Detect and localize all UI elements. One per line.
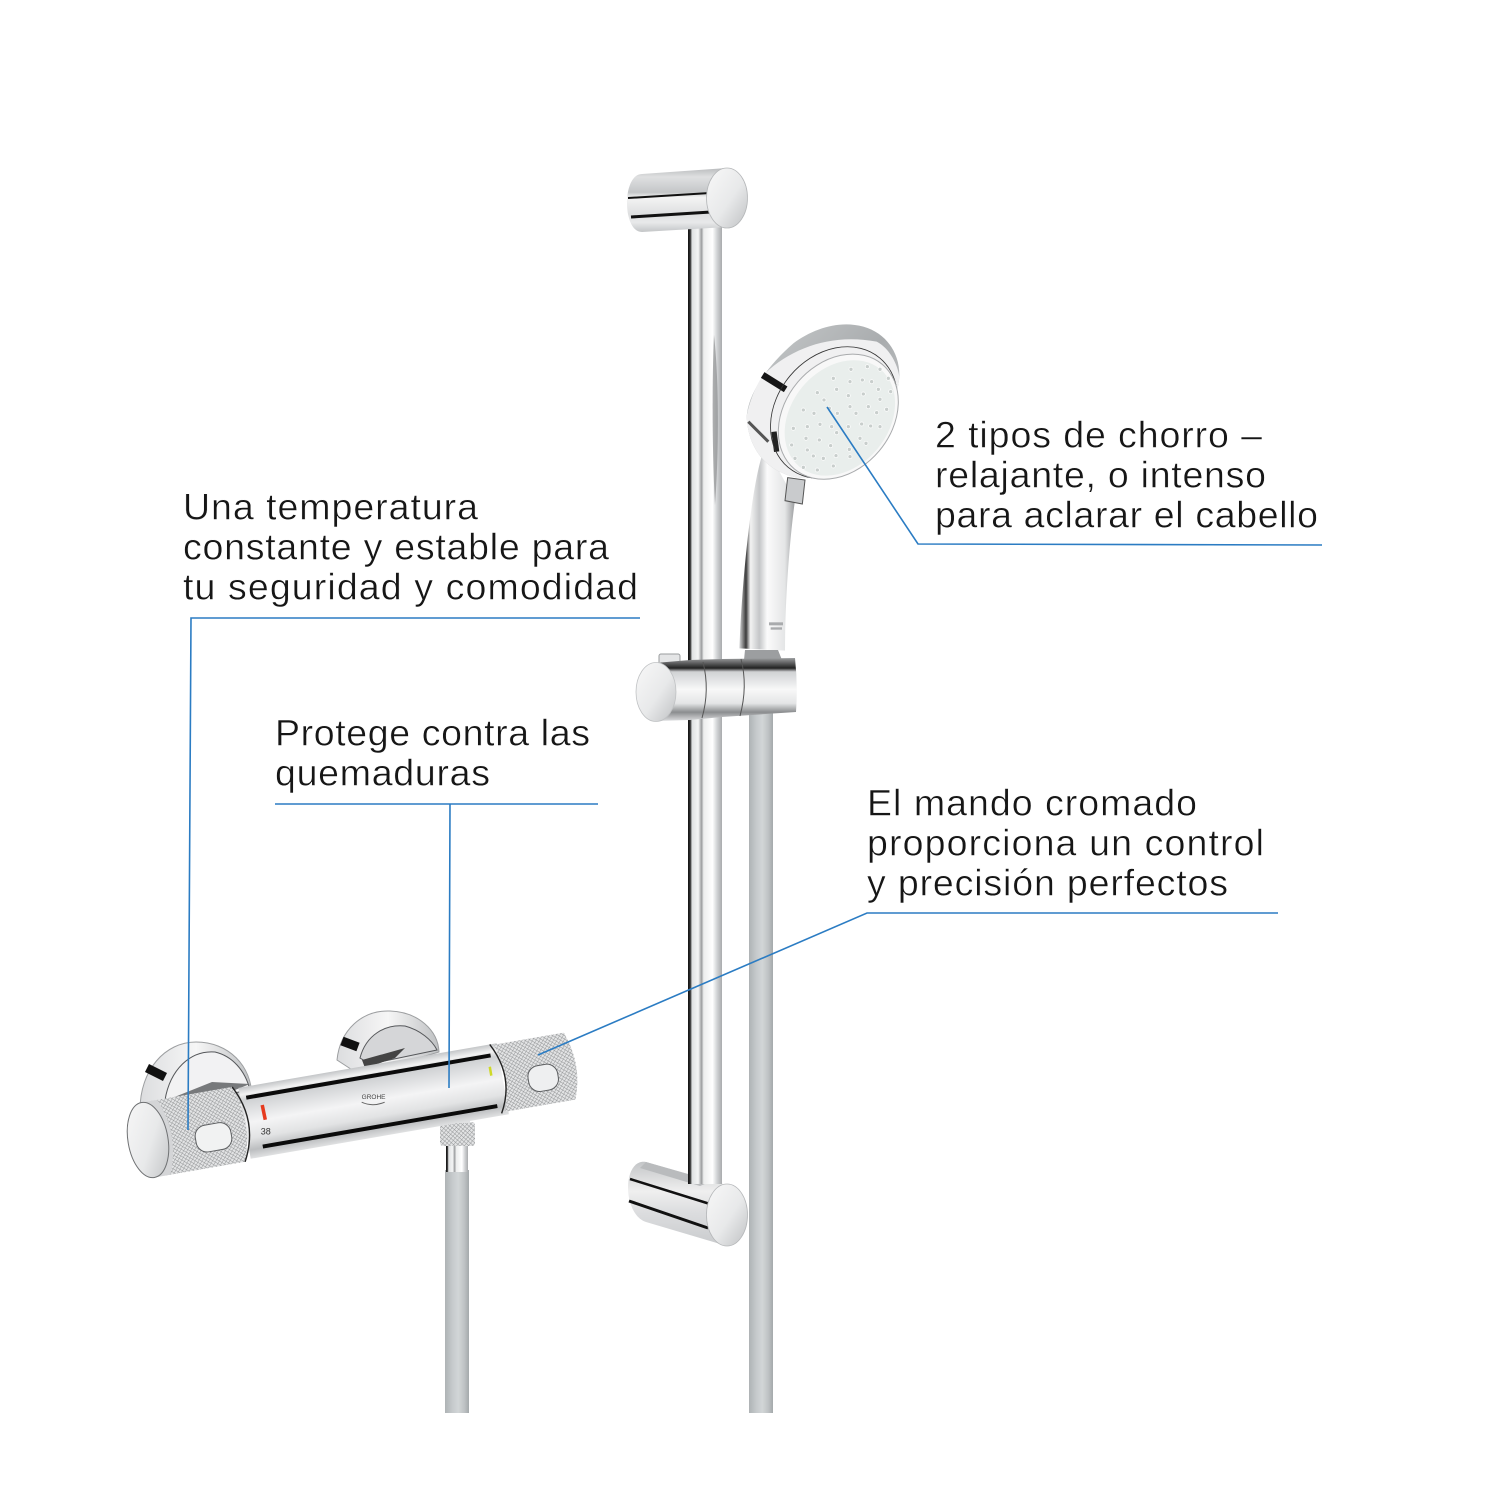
clamp knob bbox=[659, 654, 680, 666]
spray nozzles bbox=[790, 365, 893, 472]
red temperature mark bbox=[261, 1105, 267, 1120]
spray types text: para aclarar el cabello bbox=[935, 494, 1318, 536]
hose holder ring bbox=[744, 650, 782, 660]
bottom reflection bbox=[263, 1106, 497, 1147]
temperature text: tu seguridad y comodidad bbox=[183, 566, 638, 608]
callout: burn protection bbox=[275, 712, 598, 1088]
temperature text: Una temperatura bbox=[183, 486, 478, 528]
callout: temperature bbox=[183, 486, 640, 1130]
hand shower bbox=[739, 321, 924, 651]
left button bbox=[193, 1121, 234, 1154]
hose chrome collar bbox=[446, 1144, 468, 1172]
spray types text: 2 tipos de chorro – bbox=[935, 414, 1262, 456]
right button bbox=[526, 1062, 560, 1093]
wall mount, right bbox=[337, 1011, 439, 1075]
top wall bracket bbox=[627, 168, 748, 232]
chrome control text bbox=[867, 782, 1264, 904]
head back bbox=[747, 324, 899, 478]
callout: spray types bbox=[827, 407, 1322, 545]
spray face bbox=[754, 330, 923, 503]
wall hose, right bbox=[749, 708, 773, 1413]
right knurled grip bbox=[494, 1032, 582, 1112]
temperature number: 38 bbox=[261, 1127, 271, 1137]
thermostat hose bbox=[440, 1112, 475, 1413]
spray types text bbox=[935, 414, 1318, 536]
burn protection text: Protege contra las bbox=[275, 712, 590, 754]
chrome control leader line bbox=[538, 913, 1278, 1055]
thermostat body bbox=[142, 1029, 583, 1177]
clamp body bbox=[655, 658, 797, 721]
handle connector bbox=[785, 478, 805, 504]
thermostat end cap bbox=[122, 1099, 174, 1181]
handle bbox=[739, 457, 795, 651]
hose nut bbox=[440, 1122, 475, 1146]
head chrome band bbox=[747, 339, 899, 478]
slider clamp bbox=[636, 650, 797, 722]
chrome control text: y precisión perfectos bbox=[867, 862, 1228, 904]
burn protection leader line bbox=[275, 804, 598, 1088]
brand logo bbox=[362, 1094, 386, 1105]
chrome control text: El mando cromado bbox=[867, 782, 1197, 824]
bottom wall bracket bbox=[628, 1150, 748, 1246]
temperature leader line bbox=[188, 618, 640, 1130]
temperature text: constante y estable para bbox=[183, 526, 609, 568]
brand logo: GROHE bbox=[362, 1094, 386, 1101]
spray types leader line bbox=[827, 407, 1322, 545]
left chrome ring bbox=[142, 1098, 178, 1177]
collar line left bbox=[232, 1085, 255, 1162]
callout: chrome control bbox=[538, 782, 1278, 1055]
chrome control text: proporciona un control bbox=[867, 822, 1264, 864]
burn protection text: quemaduras bbox=[275, 752, 490, 794]
temperature text bbox=[183, 486, 638, 608]
burn protection text bbox=[275, 712, 590, 794]
central cylinder bbox=[238, 1043, 509, 1159]
left knurled grip bbox=[151, 1086, 252, 1176]
handle logo bbox=[769, 622, 783, 630]
collar line right bbox=[490, 1043, 511, 1113]
top reflection bbox=[246, 1055, 491, 1098]
sliding rail bbox=[688, 222, 722, 1190]
yellow mark bbox=[489, 1067, 493, 1076]
spray types text: relajante, o intenso bbox=[935, 454, 1266, 496]
wall mount, left bbox=[140, 1042, 252, 1120]
